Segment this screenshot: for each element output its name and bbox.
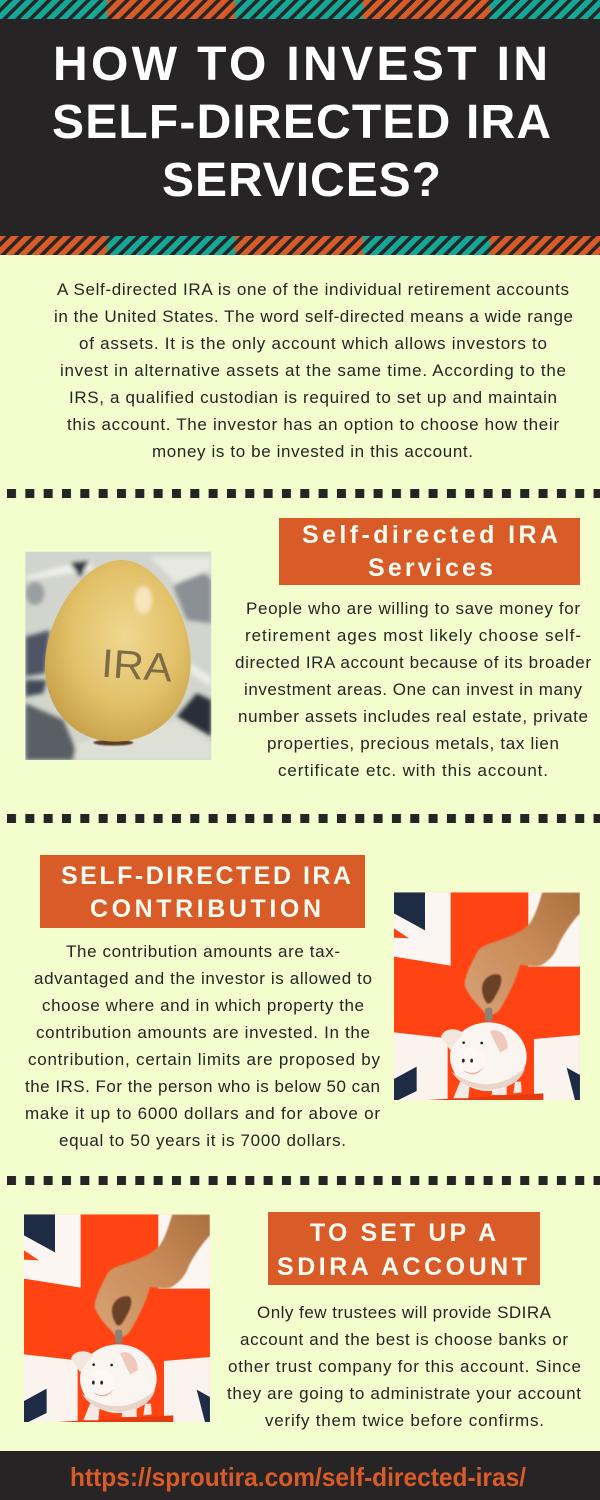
intro paragraph: in the United States. The word self-directed means a wide range xyxy=(54,307,573,326)
heading box xyxy=(279,518,580,585)
panel: self-directed IRA services xyxy=(25,518,591,780)
title: SERVICES? xyxy=(162,154,441,207)
body text: account and the best is choose banks or xyxy=(240,1330,568,1349)
image: piggy bank on flag xyxy=(24,1214,210,1422)
body text xyxy=(227,1303,581,1430)
panel: self-directed IRA contribution xyxy=(25,855,580,1150)
body text: advantaged and the investor is allowed to xyxy=(34,969,372,988)
intro paragraph: this account. The investor has an option to choose how their xyxy=(67,415,559,434)
body text: People who are willing to save money for xyxy=(246,599,580,618)
body text xyxy=(235,599,591,780)
body text: retirement ages most likely choose self- xyxy=(245,626,581,645)
body text: other trust company for this account. Since xyxy=(228,1357,581,1376)
body text: contribution amounts are invested. In the xyxy=(36,1023,370,1042)
body text: they are going to administrate your account xyxy=(227,1384,581,1403)
heading box: CONTRIBUTION xyxy=(90,895,321,923)
body text: verify them twice before confirms. xyxy=(265,1411,544,1430)
body text: Only few trustees will provide SDIRA xyxy=(257,1303,552,1322)
body text: choose where and in which property the xyxy=(42,996,364,1015)
top stripe band xyxy=(0,0,600,19)
intro paragraph: of assets. It is the only account which allows investors to xyxy=(79,334,547,353)
intro paragraph: invest in alternative assets at the same time. According to the xyxy=(60,361,566,380)
panel: set up a SDIRA account xyxy=(24,1212,581,1430)
header banner xyxy=(0,0,600,255)
footer bar with URL: https://sproutira.com/self-directed-iras/ xyxy=(70,1462,526,1492)
body text: equal to 50 years it is 7000 dollars. xyxy=(59,1131,346,1150)
body text: the IRS. For the person who is below 50 can xyxy=(25,1077,380,1096)
body text: contribution, certain limits are proposed by xyxy=(28,1050,380,1069)
body text: number assets includes real estate, private xyxy=(238,707,588,726)
divider 2 xyxy=(0,814,600,823)
heading box xyxy=(268,1212,540,1285)
bottom stripe band xyxy=(0,236,600,255)
body text xyxy=(25,942,380,1150)
intro paragraph: A Self-directed IRA is one of the individual retirement accounts xyxy=(57,280,569,299)
heading box: SDIRA ACCOUNT xyxy=(277,1253,527,1281)
body text: directed IRA account because of its broader xyxy=(235,653,591,672)
heading box: TO SET UP A xyxy=(310,1219,496,1247)
divider 1 xyxy=(0,489,600,498)
intro paragraph xyxy=(54,280,573,461)
body text: certificate etc. with this account. xyxy=(278,761,548,780)
footer bar with URL xyxy=(0,1451,600,1500)
image: golden IRA egg on dollar bills xyxy=(25,552,211,760)
image: hand dropping coin in piggy bank on flag xyxy=(394,892,580,1100)
egg label: IRA xyxy=(100,642,174,691)
intro paragraph: money is to be invested in this account. xyxy=(152,442,473,461)
body text: make it up to 6000 dollars and for above or xyxy=(25,1104,380,1123)
heading box: SELF-DIRECTED IRA xyxy=(61,862,351,890)
intro paragraph: IRS, a qualified custodian is required to set up and maintain xyxy=(69,388,557,407)
title: HOW TO INVEST IN xyxy=(53,38,548,91)
body text: investment areas. One can invest in many xyxy=(244,680,582,699)
heading box xyxy=(40,855,365,928)
heading box: Services xyxy=(368,554,493,582)
title xyxy=(52,38,551,207)
body text: properties, precious metals, tax lien xyxy=(267,734,559,753)
title: SELF-DIRECTED IRA xyxy=(52,96,551,149)
divider 3 xyxy=(0,1176,600,1185)
body text: The contribution amounts are tax- xyxy=(66,942,340,961)
heading box: Self-directed IRA xyxy=(302,521,558,549)
